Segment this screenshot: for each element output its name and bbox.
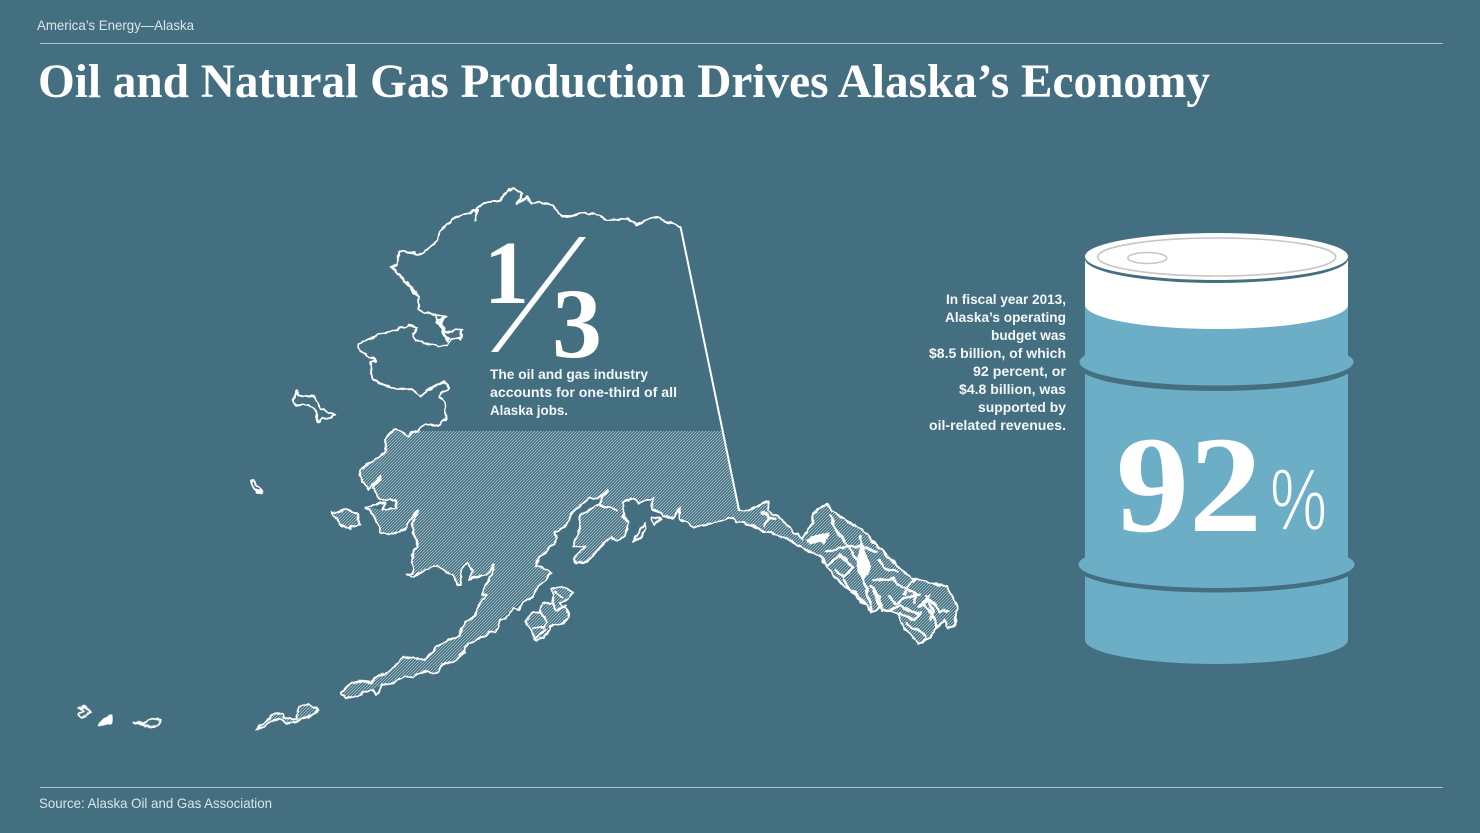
- lid shadow: [1085, 235, 1348, 283]
- oil barrel: [1078, 233, 1354, 664]
- Seward Peninsula inlet detail: [435, 315, 448, 340]
- upper rib: [1080, 338, 1354, 391]
- mainland coastline: [342, 188, 957, 698]
- denominator: 3: [552, 268, 602, 379]
- fraction one third: [484, 224, 602, 379]
- hatched southern third of mainland and islands: [260, 431, 957, 727]
- lid inner ring: [1098, 238, 1336, 276]
- budget caption: Alaska’s operating: [945, 309, 1066, 325]
- jobs caption: [490, 366, 677, 418]
- source note: Source: Alaska Oil and Gas Association: [39, 795, 272, 811]
- St. Lawrence Island: [293, 390, 335, 423]
- jobs caption: The oil and gas industry: [490, 366, 648, 382]
- coastlines and islands: [78, 188, 957, 729]
- budget caption: supported by: [978, 399, 1066, 415]
- St. Matthew Island: [251, 480, 262, 492]
- percent sign: %: [1270, 450, 1327, 549]
- Nunivak Island: [332, 509, 360, 530]
- 92 percent stat: 92: [1116, 408, 1262, 561]
- budget caption: In fiscal year 2013,: [946, 291, 1066, 307]
- Kodiak Island: [525, 587, 573, 641]
- barrel body: [1085, 300, 1348, 664]
- map of Alaska: [78, 188, 957, 729]
- numerator: 1: [484, 224, 529, 323]
- Aleutian Islands: [78, 703, 318, 729]
- jobs caption: Alaska jobs.: [490, 402, 568, 418]
- budget caption: 92 percent, or: [973, 363, 1067, 379]
- Prince William Sound islands: [633, 518, 662, 542]
- Southeast panhandle channels: [762, 513, 948, 637]
- fraction slash: [491, 237, 586, 352]
- lid: [1085, 233, 1348, 280]
- 92 percent stat: [1116, 408, 1327, 561]
- budget caption: $8.5 billion, of which: [929, 345, 1066, 361]
- budget caption: budget was: [991, 327, 1066, 343]
- white top band: [1085, 259, 1348, 329]
- budget caption: $4.8 billion, was: [959, 381, 1066, 397]
- border with Canada: [681, 228, 739, 510]
- header label: America’s Energy—Alaska: [37, 17, 194, 33]
- title: Oil and Natural Gas Production Drives Alaska’s Economy: [38, 55, 1210, 108]
- budget caption: oil-related revenues.: [929, 417, 1066, 433]
- jobs caption: accounts for one-third of all: [490, 384, 677, 400]
- bung cap: [1128, 252, 1167, 264]
- budget caption: [929, 291, 1067, 433]
- lower rib: [1078, 541, 1354, 592]
